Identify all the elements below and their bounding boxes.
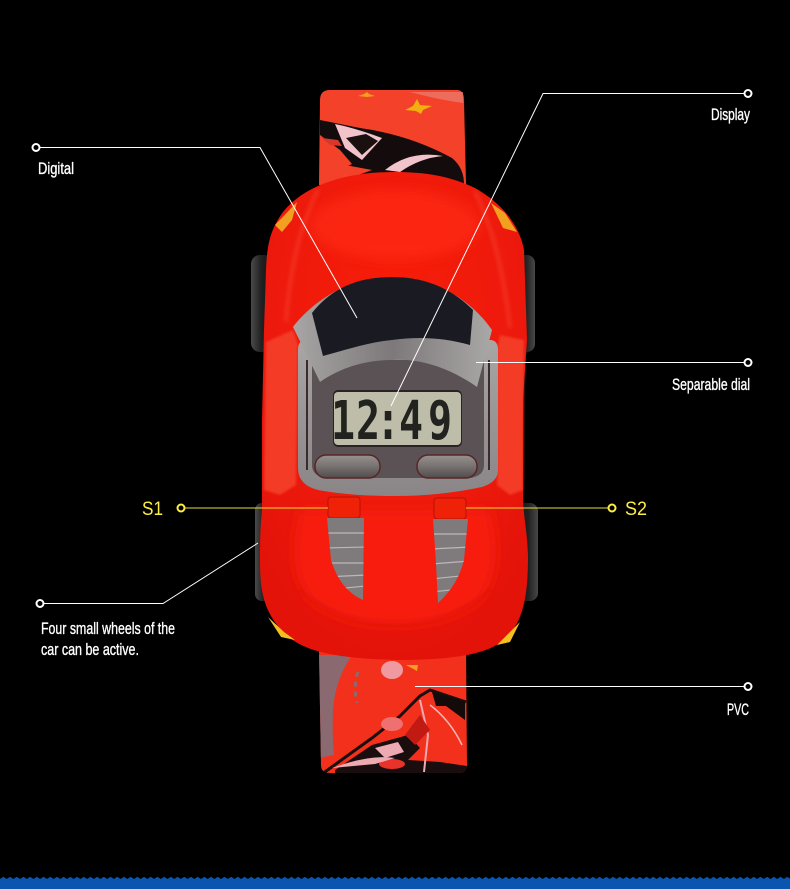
racing car artwork xyxy=(320,120,464,184)
callout: Display xyxy=(391,90,752,406)
wheel: upper left xyxy=(251,255,273,352)
car body xyxy=(260,172,528,660)
callout: S2: S2 xyxy=(625,499,647,520)
silver pill: right xyxy=(417,455,477,478)
callout: Separable dial xyxy=(476,359,752,394)
body crease lines xyxy=(286,190,318,322)
star decorations xyxy=(405,99,432,114)
button S1 xyxy=(328,497,360,518)
hood vent: left xyxy=(327,518,364,600)
roof highlight xyxy=(310,190,480,260)
wheel: lower left xyxy=(255,503,273,601)
blue footer band xyxy=(0,876,790,889)
strap artwork xyxy=(322,690,466,774)
silver pill: left xyxy=(315,455,380,478)
side panels xyxy=(264,330,298,495)
callout: Digital: Digital xyxy=(38,159,74,178)
callout: wheels xyxy=(36,543,258,659)
strap shaded edge xyxy=(319,655,352,758)
button S2 xyxy=(434,498,466,519)
callout: Separable dial: Separable dial xyxy=(672,375,750,394)
callout: wheels: Four small wheels of the xyxy=(41,619,175,638)
callout: wheels: car can be active. xyxy=(41,640,139,659)
LCD screen: 12:49 xyxy=(331,390,452,453)
watch strap: bottom xyxy=(319,650,467,774)
hood vent: right xyxy=(433,519,468,603)
callout: S1 xyxy=(142,499,328,520)
callout: PVC xyxy=(415,683,752,719)
callout: S1: S1 xyxy=(142,499,163,520)
callout: S2 xyxy=(466,499,647,520)
windshield glass xyxy=(312,277,473,356)
watch strap: top xyxy=(319,90,466,185)
callout: Display: Display xyxy=(711,105,750,124)
silver display bezel xyxy=(298,340,498,496)
wheel: upper right xyxy=(515,255,535,352)
hood xyxy=(294,510,496,625)
wheel: lower right xyxy=(517,503,538,601)
windshield frame xyxy=(293,277,492,387)
callout: Digital xyxy=(32,144,357,318)
yellow fender marks xyxy=(275,202,297,232)
callout: PVC: PVC xyxy=(727,700,749,719)
